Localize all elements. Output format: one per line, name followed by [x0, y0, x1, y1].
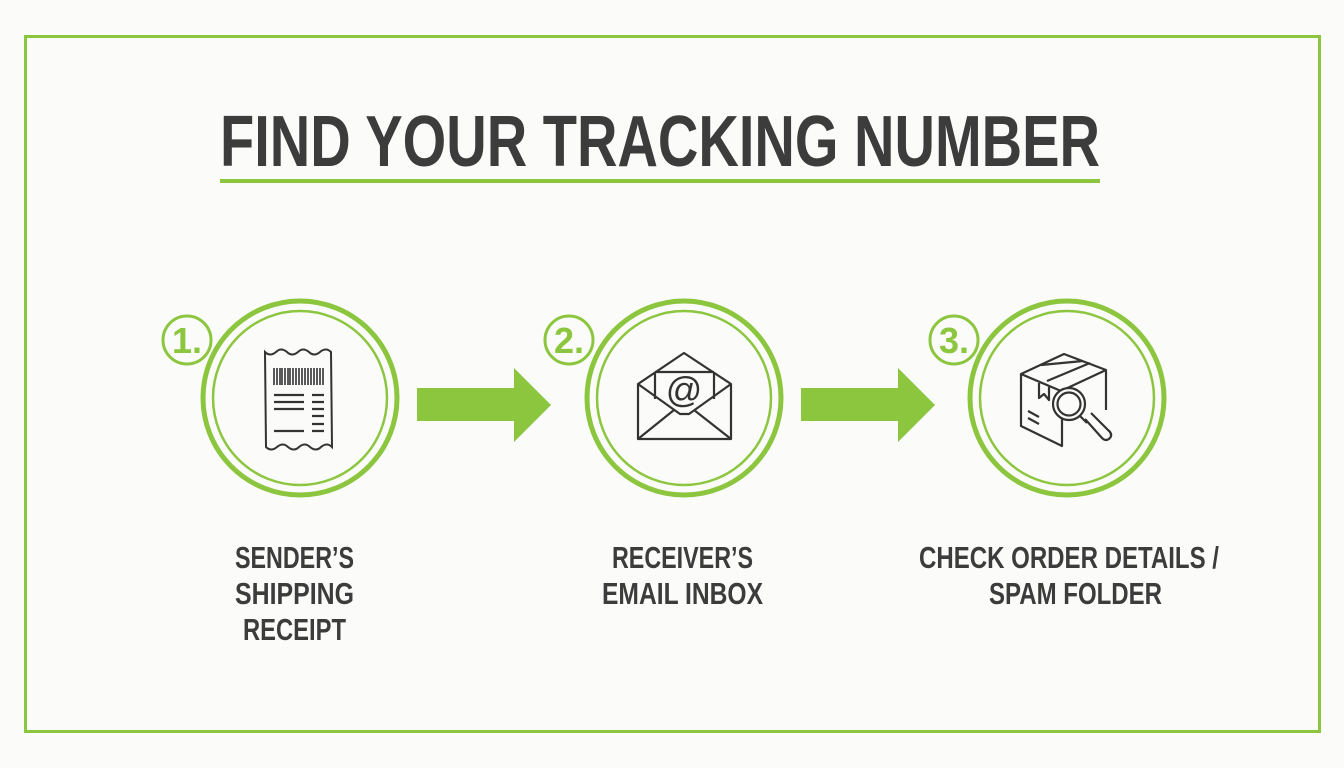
- label 3: [919, 540, 1219, 611]
- icon: envelope: [638, 353, 731, 439]
- label 1: SENDER’S: [235, 540, 354, 575]
- title: FIND YOUR TRACKING NUMBER: [220, 102, 1100, 182]
- step 3: check order details / spam folder: [919, 301, 1219, 611]
- icon: box with magnifier: [1021, 354, 1111, 446]
- circle 3: [970, 301, 1164, 495]
- circle 2: [587, 301, 781, 495]
- label 1: [235, 540, 354, 647]
- label 2: RECEIVER’S: [612, 540, 753, 575]
- icon: receipt: [265, 350, 332, 450]
- badge 3: [930, 316, 978, 364]
- label 2: EMAIL INBOX: [602, 576, 763, 611]
- arrow 1: [417, 368, 551, 442]
- circle 1: [203, 301, 397, 495]
- badge 3: 3.: [939, 320, 969, 361]
- step 1: sender's shipping receipt: [163, 301, 397, 647]
- arrow 2: [801, 368, 935, 442]
- badge 2: [545, 316, 593, 364]
- icon: envelope: @: [666, 369, 702, 410]
- badge 2: 2.: [554, 320, 584, 361]
- label 3: CHECK ORDER DETAILS /: [919, 540, 1219, 575]
- label 2: [602, 540, 763, 611]
- label 1: RECEIPT: [243, 612, 346, 647]
- badge 1: 1.: [172, 320, 202, 361]
- badge 1: [163, 316, 211, 364]
- label 1: SHIPPING: [235, 576, 354, 611]
- step 2: receiver's email inbox: [545, 301, 781, 611]
- label 3: SPAM FOLDER: [989, 576, 1162, 611]
